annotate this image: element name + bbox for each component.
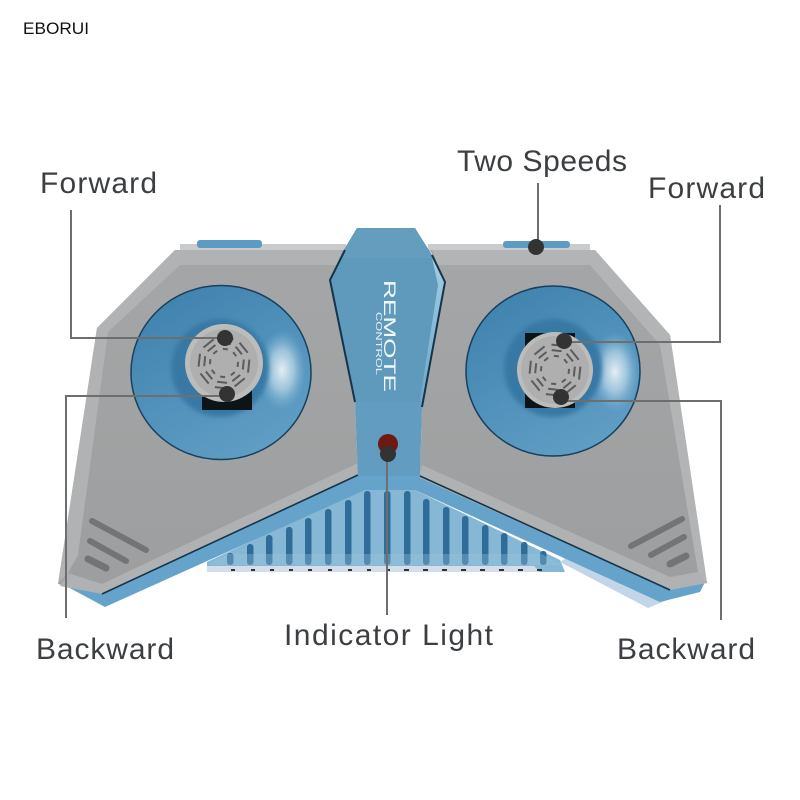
indicator light xyxy=(378,434,398,454)
label: right backward: Backward xyxy=(617,633,755,666)
label: right forward: Forward xyxy=(648,172,765,205)
remote control illustration xyxy=(58,228,707,608)
callout: left forward xyxy=(71,210,225,338)
left knob xyxy=(185,324,263,402)
logo text xyxy=(374,280,399,392)
left vent grooves xyxy=(88,521,146,568)
callout dots xyxy=(217,239,572,462)
logo text: CONTROL xyxy=(374,312,384,375)
callout lines xyxy=(66,183,721,620)
right vent grooves xyxy=(631,519,686,564)
label: left forward: Forward xyxy=(40,167,157,200)
callout: right backward xyxy=(561,401,721,620)
label: indicator light: Indicator Light xyxy=(284,619,494,652)
speed switch tabs xyxy=(180,240,590,252)
right joystick xyxy=(466,286,640,456)
left joystick xyxy=(131,286,311,460)
callout: right forward xyxy=(564,205,720,342)
callout: left backward xyxy=(66,396,227,618)
right gray panel xyxy=(420,250,707,590)
logo text: REMOTE xyxy=(380,280,399,392)
callout: two speeds xyxy=(537,183,539,247)
label: two speeds: Two Speeds xyxy=(457,145,627,178)
labels xyxy=(36,145,765,666)
label: left backward: Backward xyxy=(36,633,174,666)
center blue column xyxy=(330,228,445,476)
brand label: EBORUI xyxy=(23,20,89,38)
callout: indicator light xyxy=(386,454,388,615)
ribbed base xyxy=(207,490,672,608)
right knob xyxy=(517,332,593,408)
blue undersides xyxy=(66,474,705,607)
left gray panel xyxy=(58,250,358,594)
